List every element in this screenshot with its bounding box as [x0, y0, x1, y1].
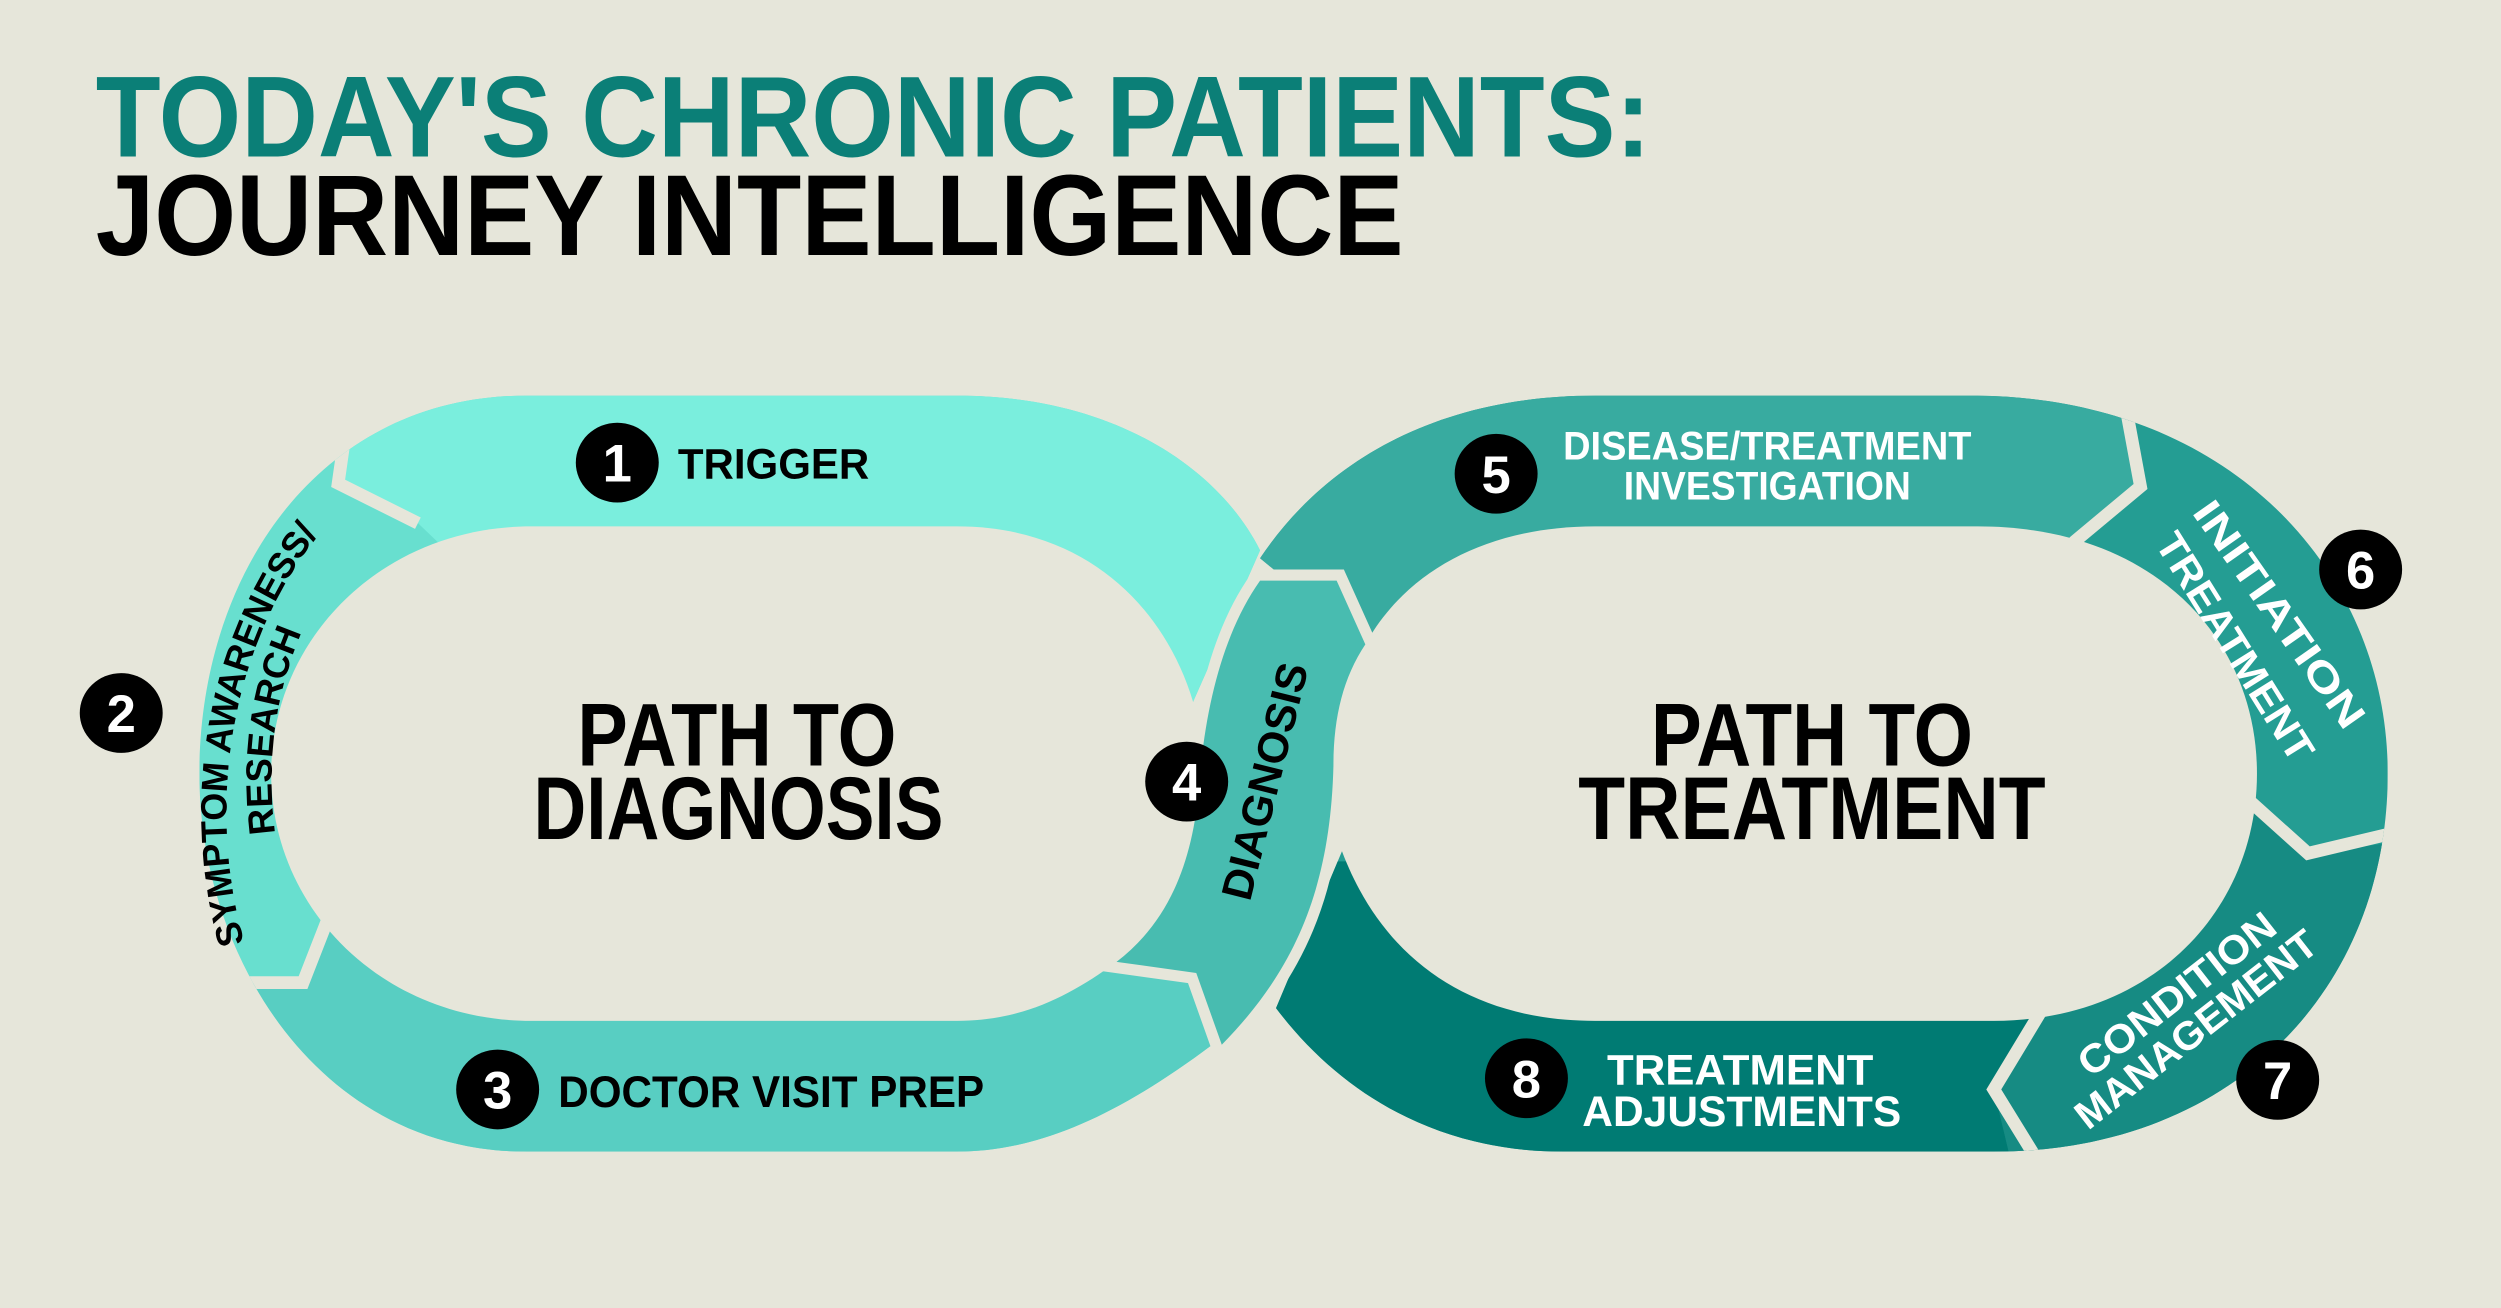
badge 1 [576, 423, 659, 502]
label: treatment adjustments: ADJUSTMENTS [1582, 1088, 1901, 1136]
badge 5: 5 [1481, 446, 1511, 505]
segment 3: doctor visit prep [253, 932, 1210, 1152]
segment 8 [1276, 861, 2029, 1152]
label: initiation treatment: INITIATION [2184, 492, 2374, 737]
badge 7 [2236, 1040, 2319, 1120]
left loop: path to diagnosis [200, 396, 1260, 1152]
segment 1: trigger [337, 396, 1260, 702]
badge 8: 8 [1512, 1050, 1541, 1109]
badge 4 [1145, 742, 1228, 821]
label: condition management: MANAGEMENT [2067, 922, 2326, 1138]
label: diagnosis: DIAGNOSIS [1213, 658, 1318, 905]
badge 4: 4 [1172, 754, 1201, 813]
segment 4: diagnosis band [1117, 581, 1365, 1045]
label: condition management: CONDITION [2069, 904, 2285, 1086]
badge 7: 7 [2263, 1052, 2292, 1111]
badge 6: 6 [2346, 542, 2375, 601]
label: trigger: TRIGGER [678, 441, 869, 489]
badge 3: 3 [483, 1062, 512, 1121]
label: disease/treatment investigation [1563, 424, 1971, 508]
label: treatment adjustments: TREATMENT [1607, 1047, 1873, 1095]
label: initiation treatment [2147, 492, 2374, 770]
badge 2 [80, 673, 163, 753]
center text: path to treatment: TREATMENT [1578, 758, 2046, 858]
badge 3 [456, 1050, 539, 1129]
label: doctor visit prep: DOCTOR VISIT PREP [558, 1068, 984, 1117]
label: symptom awareness/research: RESEARCH [246, 625, 301, 834]
center text: path to treatment: PATH TO [1651, 685, 1973, 785]
badge 2: 2 [107, 685, 136, 744]
center text: path to diagnosis: PATH TO [577, 685, 896, 785]
segment 7 [1999, 814, 2382, 1152]
badge 1: 1 [603, 435, 632, 494]
label: disease/treatment investigation: INVESTIGATION [1624, 464, 1911, 508]
center text: path to diagnosis [534, 685, 943, 858]
badge 5 [1455, 434, 1538, 514]
label: symptom awareness/research: SYMPTOM AWARENESS/ [200, 518, 316, 946]
label: initiation treatment: TREATMENT [2147, 525, 2322, 770]
center text: path to treatment [1578, 685, 2046, 858]
label: disease/treatment investigation: DISEASE/TREATMENT [1563, 424, 1971, 468]
title: TODAY'S CHRONIC PATIENTS: [96, 53, 1651, 181]
badge 6 [2319, 530, 2402, 609]
right loop: path to treatment [1260, 396, 2388, 1152]
label: treatment adjustments [1582, 1047, 1901, 1136]
segment 5 [1260, 396, 2134, 632]
title [96, 53, 1651, 280]
title: JOURNEY INTELLIGENCE [96, 152, 1404, 280]
center text: path to diagnosis: DIAGNOSIS [534, 758, 943, 858]
badge 8 [1485, 1038, 1568, 1118]
